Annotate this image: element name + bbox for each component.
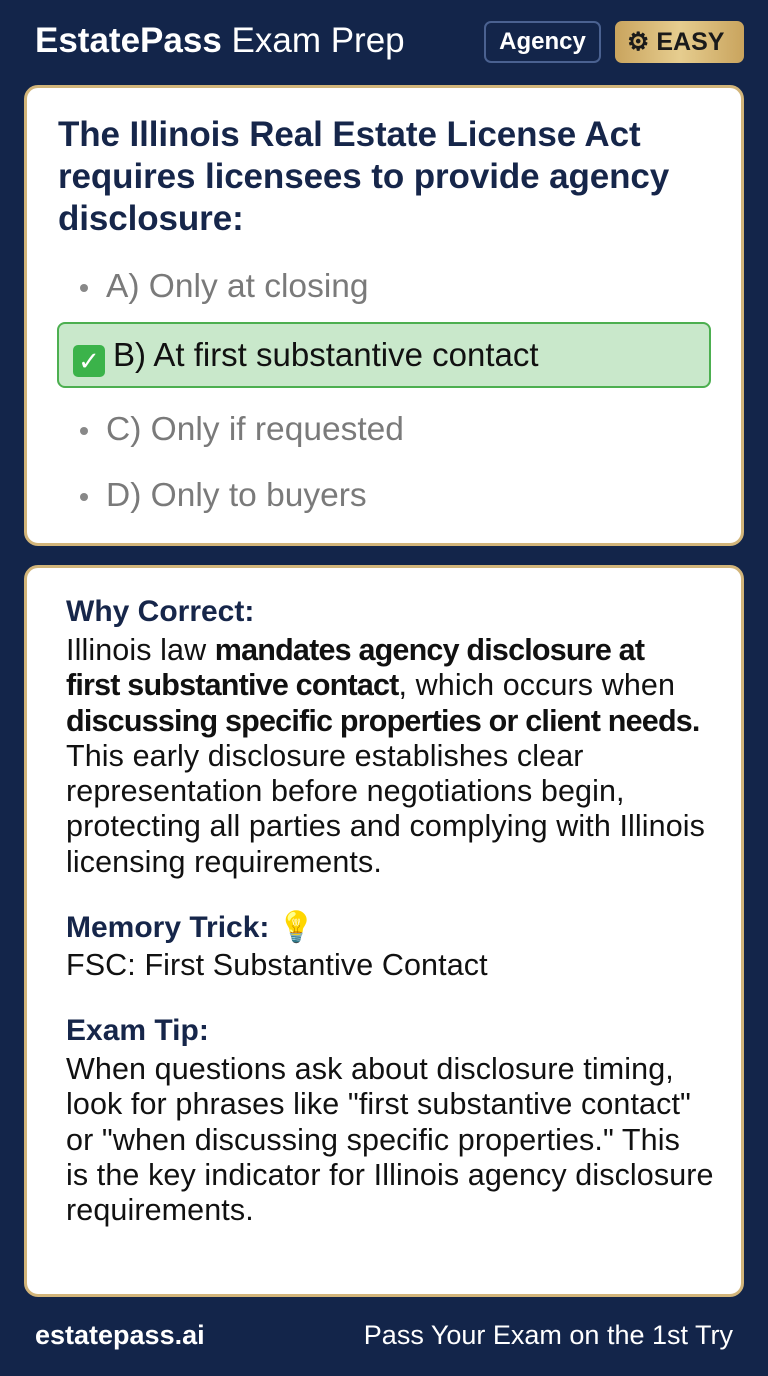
why correct text: first substantive contact, which occurs when bbox=[66, 668, 675, 702]
option B correct bbox=[57, 322, 711, 388]
footer: brand: estatepass.ai bbox=[35, 1320, 205, 1350]
exam tip text: is the key indicator for Illinois agency disclosure bbox=[66, 1158, 714, 1192]
question text: The Illinois Real Estate License Act bbox=[58, 115, 641, 154]
badge: EASY bbox=[615, 21, 744, 63]
panel: explanation bbox=[24, 565, 744, 1297]
title: EstatePass Exam Prep bbox=[35, 21, 405, 60]
why correct text: licensing requirements. bbox=[66, 845, 382, 879]
panel: question bbox=[24, 85, 744, 546]
option D: D) Only to buyers bbox=[106, 477, 367, 514]
why correct text: Illinois law mandates agency disclosure at bbox=[66, 633, 644, 667]
why correct text: This early disclosure establishes clear bbox=[66, 739, 584, 773]
option B correct: ✓ bbox=[78, 346, 100, 376]
why correct text: discussing specific properties or client needs. bbox=[66, 704, 700, 738]
question text: requires licensees to provide agency bbox=[58, 157, 669, 196]
heading: exam tip: Exam Tip: bbox=[66, 1014, 209, 1047]
exam tip text: When questions ask about disclosure timing, bbox=[66, 1052, 674, 1086]
option A: A) Only at closing bbox=[106, 268, 369, 305]
exam tip text: or "when discussing specific properties." This bbox=[66, 1123, 680, 1157]
why correct text: representation before negotiations begin, bbox=[66, 774, 625, 808]
badge: Agency: Agency bbox=[499, 28, 586, 55]
question text: disclosure: bbox=[58, 199, 244, 238]
option B correct: B) At first substantive contact bbox=[113, 336, 539, 373]
badge: Agency bbox=[484, 21, 601, 63]
why correct text: protecting all parties and complying with Illinois bbox=[66, 809, 705, 843]
memory trick text: FSC: First Substantive Contact bbox=[66, 948, 488, 982]
exam tip text: requirements. bbox=[66, 1193, 254, 1227]
question text bbox=[58, 115, 669, 238]
exam tip text: look for phrases like "first substantive contact" bbox=[66, 1087, 691, 1121]
footer: tagline: Pass Your Exam on the 1st Try bbox=[364, 1320, 733, 1350]
heading: memory trick: Memory Trick: 💡 bbox=[66, 911, 315, 944]
heading: why correct: Why Correct: bbox=[66, 595, 254, 628]
badge: EASY: ⚙ EASY bbox=[627, 28, 724, 56]
exam tip text bbox=[66, 1052, 714, 1227]
option C: C) Only if requested bbox=[106, 411, 404, 448]
why correct text bbox=[66, 633, 705, 879]
